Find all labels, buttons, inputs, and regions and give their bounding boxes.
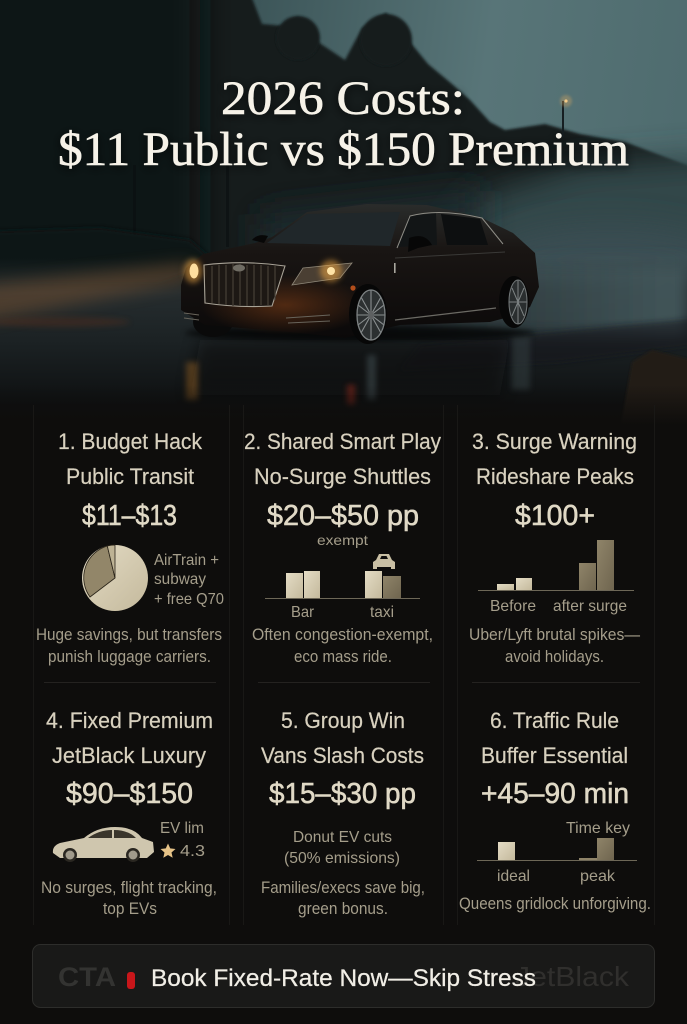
note: exempt bbox=[317, 532, 368, 548]
front left wheel bbox=[193, 307, 233, 337]
heading: 4. Fixed Premium bbox=[46, 708, 213, 733]
description bbox=[261, 879, 425, 918]
front right wheel bbox=[349, 284, 387, 344]
bar chart: Bar bbox=[291, 604, 315, 621]
mirror bbox=[408, 236, 432, 252]
call to action bar bbox=[32, 944, 654, 1008]
description: Huge savings, but transfers bbox=[36, 626, 222, 644]
heading: Public Transit bbox=[66, 464, 194, 489]
heading: Vans Slash Costs bbox=[261, 743, 424, 768]
price: $15–$30 pp bbox=[269, 778, 416, 810]
heading bbox=[244, 429, 441, 489]
heading: 6. Traffic Rule bbox=[490, 708, 619, 733]
description: Uber/Lyft brutal spikes— bbox=[469, 626, 640, 644]
description: Often congestion-exempt, bbox=[252, 626, 433, 644]
description: green bonus. bbox=[298, 900, 388, 918]
icon: red marker bbox=[127, 972, 135, 989]
price: $11–$13 bbox=[82, 500, 177, 532]
panel 1: budget hack bbox=[36, 429, 224, 666]
panel 5: group win bbox=[261, 708, 425, 918]
heading bbox=[481, 708, 628, 768]
headlights bbox=[292, 263, 352, 285]
rating: 4.3 bbox=[180, 843, 205, 860]
heading: Rideshare Peaks bbox=[476, 464, 634, 489]
price: $90–$150 bbox=[66, 778, 193, 810]
button text: Book Fixed-Rate Now—Skip Stress bbox=[151, 965, 536, 992]
bar chart: taxi bbox=[370, 604, 394, 621]
bar chart: Time key bbox=[566, 820, 630, 837]
heading bbox=[261, 708, 424, 768]
dark panel background bbox=[0, 385, 687, 1024]
heading: 1. Budget Hack bbox=[58, 429, 203, 454]
price: +45–90 min bbox=[481, 778, 629, 810]
pie label bbox=[154, 552, 224, 608]
heading: 5. Group Win bbox=[281, 708, 405, 733]
side windows bbox=[398, 213, 437, 247]
rating: EV lim bbox=[160, 820, 204, 837]
title: 2026 Costs: bbox=[221, 72, 465, 125]
bar chart bbox=[265, 571, 420, 621]
heading: No-Surge Shuttles bbox=[254, 464, 431, 489]
description: Queens gridlock unforgiving. bbox=[459, 895, 651, 913]
heading bbox=[46, 708, 213, 768]
description: top EVs bbox=[103, 900, 157, 918]
windshield bbox=[267, 212, 400, 246]
donut note: (50% emissions) bbox=[284, 850, 400, 867]
description bbox=[36, 626, 222, 666]
pie label: subway bbox=[154, 571, 206, 588]
bar chart bbox=[478, 540, 634, 615]
description bbox=[252, 626, 433, 666]
bar chart bbox=[477, 820, 637, 885]
description: avoid holidays. bbox=[505, 648, 604, 666]
heading: 2. Shared Smart Play bbox=[244, 429, 441, 454]
hero photo scene: rainy road at dusk bbox=[0, 0, 687, 430]
description bbox=[469, 626, 640, 666]
heading: JetBlack Luxury bbox=[52, 743, 206, 768]
title: $11 Public vs $150 Premium bbox=[58, 123, 629, 176]
title bbox=[58, 72, 629, 176]
grille bbox=[204, 263, 285, 307]
limousine bbox=[181, 204, 539, 344]
description: eco mass ride. bbox=[294, 648, 392, 666]
description: Families/execs save big, bbox=[261, 879, 425, 897]
panel 6: traffic rule bbox=[459, 708, 651, 913]
pie chart bbox=[82, 545, 148, 611]
bar chart: after surge bbox=[553, 598, 627, 615]
panel 2: shared smart play bbox=[244, 429, 441, 666]
panel 3: surge warning bbox=[469, 429, 640, 666]
heading bbox=[472, 429, 637, 489]
price: $20–$50 pp bbox=[267, 500, 419, 532]
rear wheel bbox=[499, 276, 529, 328]
description: No surges, flight tracking, bbox=[41, 879, 217, 897]
bar chart: Before bbox=[490, 598, 536, 615]
ghost label: JetBlack: JetBlack bbox=[515, 961, 630, 992]
chrome trim bbox=[395, 308, 496, 320]
donut note bbox=[284, 829, 400, 867]
pie label: + free Q70 bbox=[154, 591, 224, 608]
bar chart: ideal bbox=[497, 868, 530, 885]
rating bbox=[160, 820, 205, 860]
description bbox=[41, 879, 217, 918]
ghost label: CTA: CTA bbox=[58, 962, 116, 992]
bar chart: peak bbox=[580, 868, 616, 885]
panel 4: fixed premium bbox=[41, 708, 217, 918]
heading bbox=[58, 429, 203, 489]
icon: sedan bbox=[53, 827, 154, 862]
heading: Buffer Essential bbox=[481, 743, 628, 768]
icon: car bbox=[373, 554, 395, 569]
price: $100+ bbox=[515, 500, 595, 532]
pie label: AirTrain + bbox=[154, 552, 219, 569]
donut note: Donut EV cuts bbox=[293, 829, 392, 846]
description: punish luggage carriers. bbox=[48, 648, 211, 666]
heading: 3. Surge Warning bbox=[472, 429, 637, 454]
